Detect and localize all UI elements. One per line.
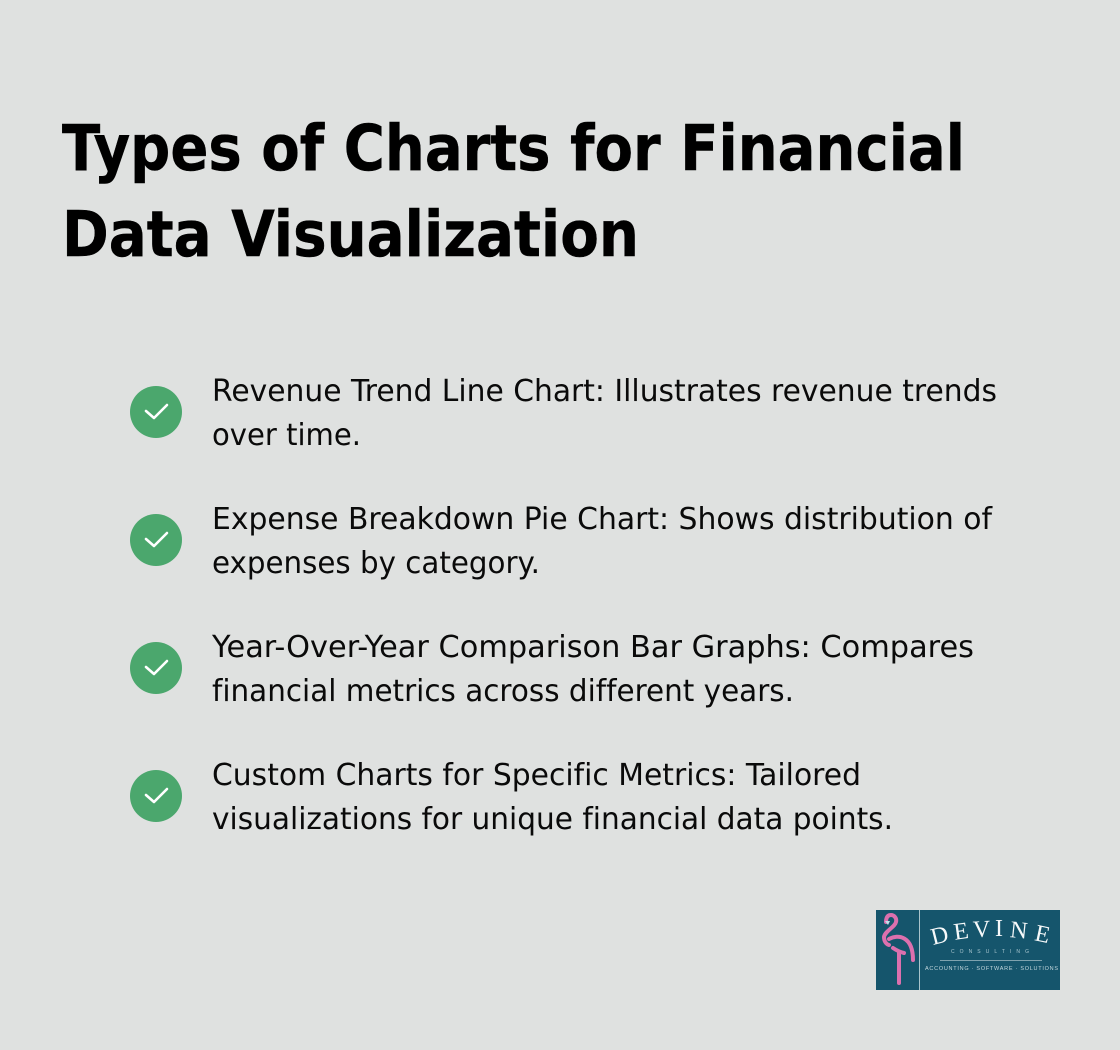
logo wordmark: E xyxy=(952,918,970,946)
logo subtitle: CONSULTING xyxy=(951,949,1029,955)
logo wordmark: D xyxy=(928,921,951,951)
logo wordmark: V xyxy=(972,916,992,943)
item: year-over-year comparison bar graphs: financial metrics across different years. xyxy=(212,674,794,709)
item: custom charts for specific metrics xyxy=(130,758,893,837)
item: custom charts for specific metrics: Custom Charts for Specific Metrics: Tailored xyxy=(212,758,861,793)
title: Data Visualization xyxy=(62,198,639,271)
item: year-over-year comparison bar graphs: Year-Over-Year Comparison Bar Graphs: Compares xyxy=(211,630,974,665)
item: expense breakdown pie chart: expenses by category. xyxy=(212,546,540,581)
logo: Devine Consulting xyxy=(876,910,1060,990)
logo wordmark: N xyxy=(1009,917,1029,945)
item: revenue trend line chart: over time. xyxy=(212,418,361,453)
checklist xyxy=(130,374,997,837)
item: expense breakdown pie chart xyxy=(130,502,993,581)
title xyxy=(62,112,965,271)
item: revenue trend line chart xyxy=(130,374,997,453)
item: custom charts for specific metrics: visualizations for unique financial data points. xyxy=(212,802,893,837)
logo wordmark xyxy=(928,916,1052,951)
icon: flamingo xyxy=(884,915,913,983)
logo wordmark: E xyxy=(1032,921,1052,949)
item: expense breakdown pie chart: Expense Breakdown Pie Chart: Shows distribution of xyxy=(212,502,993,537)
item: year-over-year comparison bar graphs xyxy=(130,630,974,709)
title: Types of Charts for Financial xyxy=(62,112,965,185)
item: revenue trend line chart: Revenue Trend Line Chart: Illustrates revenue trends xyxy=(212,374,997,409)
logo tagline: ACCOUNTING · SOFTWARE · SOLUTIONS xyxy=(925,966,1058,972)
logo wordmark: I xyxy=(995,916,1003,942)
